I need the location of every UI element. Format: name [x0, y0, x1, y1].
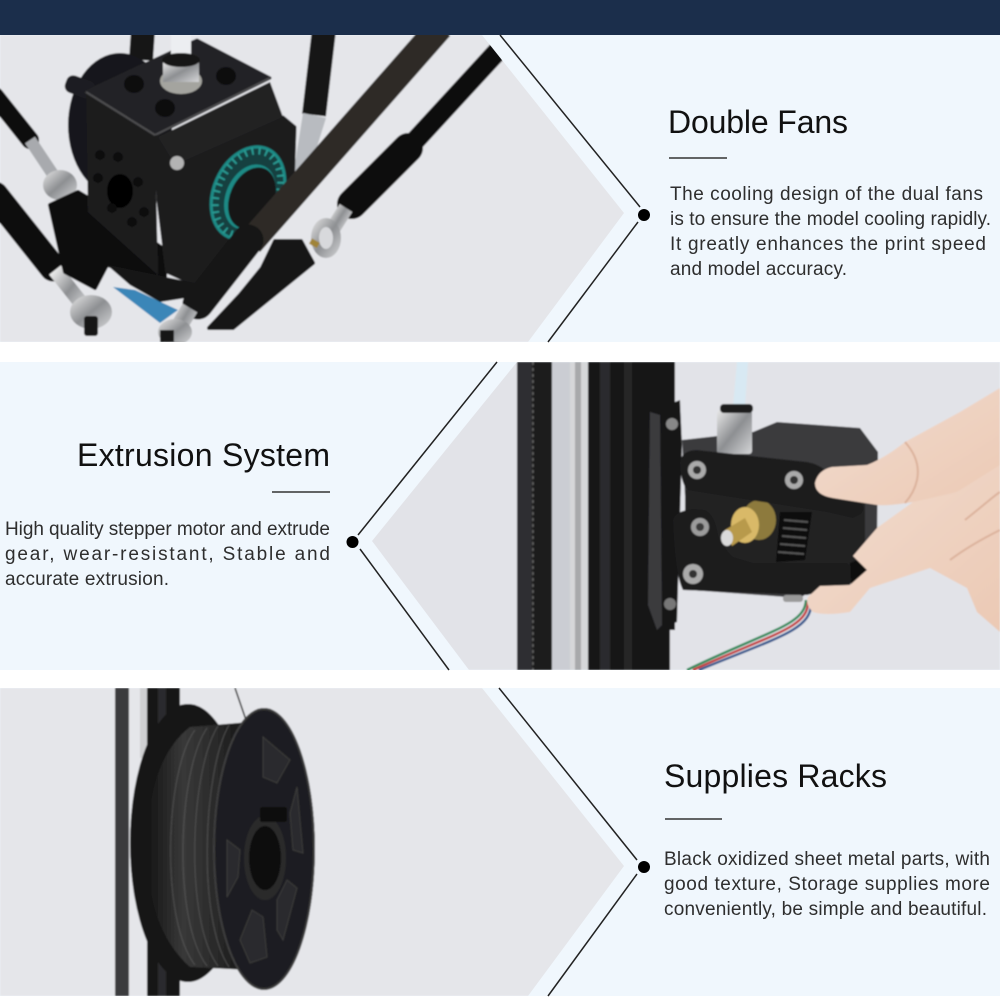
connector lines and dot — [500, 35, 650, 342]
left face with holes — [86, 150, 158, 276]
heading: supplies racks: Supplies Racks — [664, 758, 887, 794]
tube and fitting — [717, 362, 753, 454]
rear rods — [141, 30, 326, 175]
text block: supplies racks: conveniently, be simple and beautiful. — [664, 899, 987, 920]
lower plate — [107, 265, 195, 302]
left rods and joints — [0, 96, 112, 336]
spool windows — [227, 737, 303, 963]
connector lines and dot — [346, 362, 497, 670]
back flange — [129, 703, 219, 983]
text block: double fans: and model accuracy. — [670, 259, 847, 280]
motor — [682, 422, 878, 598]
text block: double fans — [670, 184, 991, 280]
connector lines and dot — [499, 688, 650, 996]
photo: delta effector with fans — [0, 35, 624, 342]
left bracket — [50, 192, 165, 288]
rear blower housing — [68, 53, 172, 197]
right bracket — [209, 241, 313, 328]
hand — [807, 388, 1000, 632]
heading: extrusion system: Extrusion System — [77, 437, 330, 473]
text block: extrusion system: High quality stepper motor and extrude — [5, 519, 330, 540]
gear recess — [684, 490, 866, 566]
heading: double fans: Double Fans — [668, 104, 848, 140]
rack uprights — [115, 688, 180, 996]
spool hub — [244, 816, 286, 900]
brass gear — [721, 500, 776, 546]
text block: double fans: is to ensure the model cooling rapidly. — [670, 209, 991, 230]
filament body — [158, 722, 242, 970]
fan housing — [155, 82, 301, 287]
text block: supplies racks — [664, 849, 990, 920]
panel: supplies racks — [0, 688, 1000, 996]
fan wheel — [208, 144, 288, 240]
photo: extruder with hand — [360, 362, 1000, 670]
text block: extrusion system: accurate extrusion. — [5, 569, 169, 590]
rail and extrusion — [552, 362, 676, 670]
wires — [687, 600, 811, 670]
right rod and joint — [309, 43, 505, 258]
top face with screws and fitting — [86, 35, 270, 135]
text block: double fans: It greatly enhances the print speed — [670, 234, 986, 255]
text block: double fans: The cooling design of the dual fans — [670, 184, 983, 205]
top navy band — [0, 0, 1000, 35]
panel: extrusion system — [0, 362, 1000, 670]
text block: supplies racks: good texture, Storage supplies more — [664, 874, 990, 895]
text block: supplies racks: Black oxidized sheet metal parts, with — [664, 849, 990, 870]
large diagonal rod — [158, 27, 440, 345]
photo: filament spool on rack — [0, 688, 624, 996]
front flange — [213, 708, 315, 990]
text block: extrusion system — [5, 519, 330, 590]
lower lever arm — [673, 509, 868, 595]
panel: double fans — [0, 27, 1000, 345]
blue plate — [113, 287, 178, 323]
upper lever arm — [680, 450, 827, 503]
belt — [516, 362, 534, 670]
mount plate — [648, 400, 682, 630]
text block: extrusion system: gear, wear-resistant, Stable and — [5, 544, 330, 565]
filament strand — [235, 688, 246, 720]
